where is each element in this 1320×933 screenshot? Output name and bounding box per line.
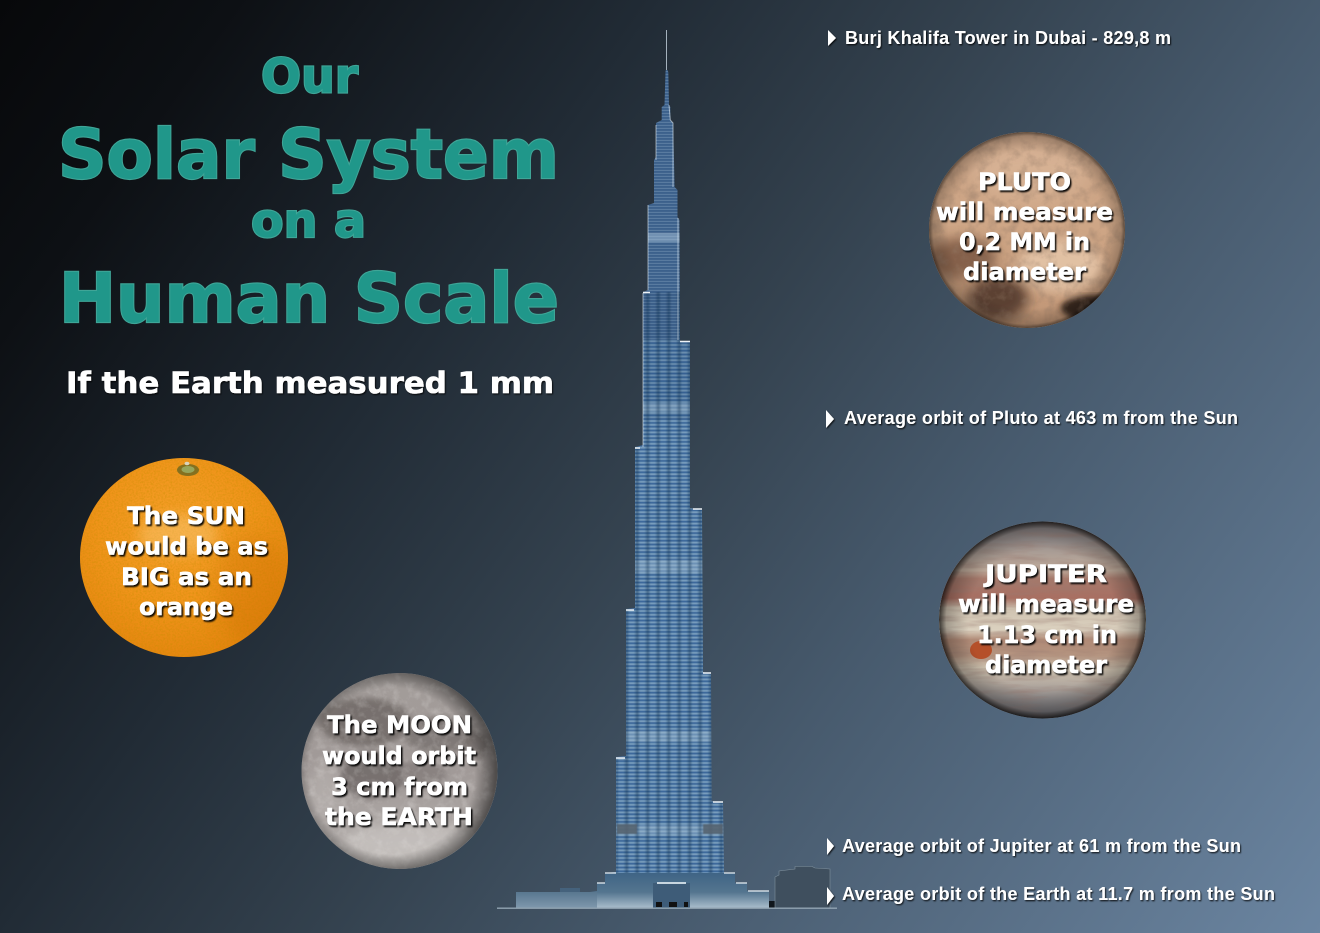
Burj Khalifa tower illustration [497,30,837,909]
tower spire [666,30,668,72]
moon caption: the EARTH [325,803,473,831]
moon caption [322,711,476,831]
title [58,50,559,339]
sun caption: would be as [105,532,268,560]
Pluto image [928,131,1129,329]
title line: on a: on a [251,194,366,249]
tower podium [516,873,776,908]
light mechanical floor bands [616,232,724,835]
Pluto caption: PLUTO [978,168,1071,196]
Pluto caption: will measure [936,198,1113,226]
subtitle: If the Earth measured 1 mm [66,366,554,400]
tower shaft [612,70,724,873]
Jupiter caption: diameter [985,651,1107,679]
title line: Human Scale: Human Scale [59,259,559,339]
panel: Pluto [928,131,1129,329]
orange stem [177,462,199,476]
ground line [497,908,837,909]
tower edge highlights [643,105,678,447]
sun caption: orange [139,593,233,621]
Jupiter caption: will measure [958,590,1134,618]
tower side building [775,866,830,908]
sun caption: The SUN [127,502,245,530]
Great Red Spot [970,641,992,659]
Pluto caption [936,168,1113,286]
orange image [78,456,295,660]
Jupiter caption: 1.13 cm in [977,621,1117,649]
panel: moon [300,672,500,872]
label: Pluto orbit: Average orbit of Pluto at 463 m from the Sun [844,408,1238,428]
title line: Solar System: Solar System [58,115,559,195]
panel: orange sun [78,456,295,660]
scalloped vertical columns [616,292,724,882]
moon caption: would orbit [322,742,476,770]
label: Earth orbit: Average orbit of the Earth at 11.7 m from the Sun [842,884,1275,904]
sun caption [105,502,268,621]
label: Jupiter orbit: Average orbit of Jupiter at 61 m from the Sun [842,836,1241,856]
label: Burj Khalifa height: Burj Khalifa Tower in Dubai - 829,8 m [845,28,1171,48]
Jupiter caption [958,560,1134,679]
moon caption: 3 cm from [331,773,468,801]
tower step caps [616,292,723,802]
title line: Our: Our [261,50,359,104]
Pluto caption: 0,2 MM in [959,228,1090,256]
sun caption: BIG as an [121,563,252,591]
Pluto caption: diameter [963,258,1086,286]
panel: Jupiter [938,521,1148,719]
Jupiter image [938,521,1148,719]
dark mechanical patches [617,824,637,834]
moon image [300,672,500,872]
Jupiter caption: JUPITER [983,560,1107,588]
moon caption: The MOON [327,711,472,739]
